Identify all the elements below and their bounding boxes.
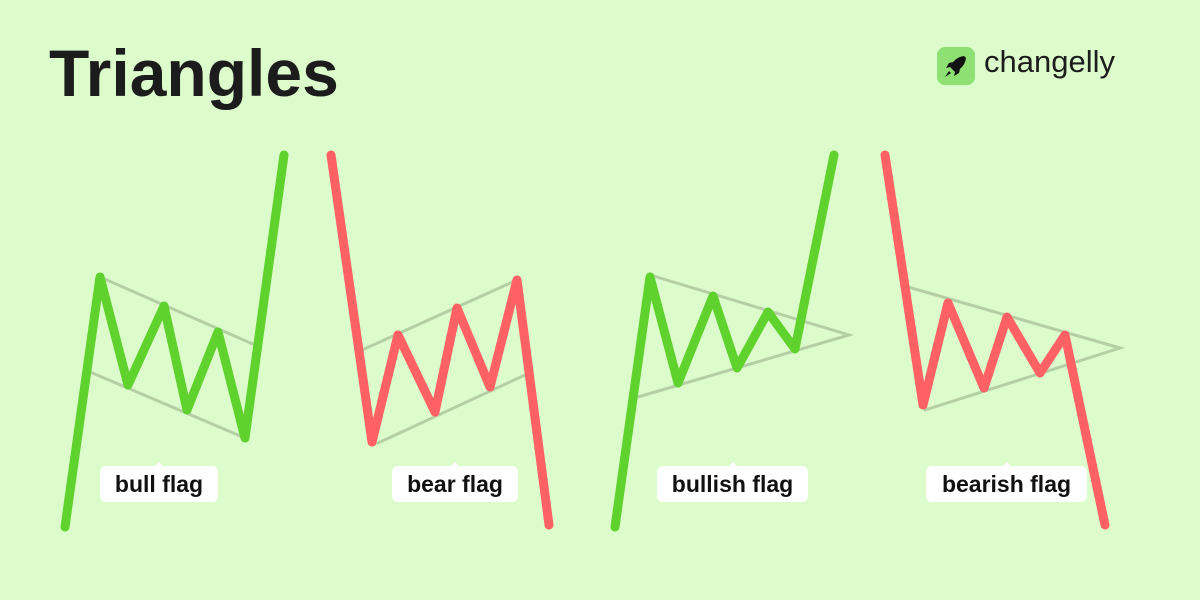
label: bull flag: bull flag — [115, 471, 203, 497]
bear flag line — [331, 155, 549, 525]
label: bear flag: bear flag — [407, 471, 503, 497]
logo: changelly: changelly — [984, 44, 1115, 79]
bullish flag line — [615, 155, 834, 527]
icon: rocket — [937, 47, 975, 85]
label: bullish flag — [657, 466, 808, 502]
label: bullish flag: bullish flag — [672, 471, 793, 497]
logo: changelly — [937, 44, 1115, 85]
label: bearish flag — [926, 466, 1087, 502]
label: bearish flag: bearish flag — [942, 471, 1071, 497]
label: bull flag — [100, 466, 218, 502]
bearish flag line — [885, 155, 1105, 525]
title: Triangles — [49, 36, 339, 110]
label: bear flag — [392, 466, 518, 502]
bull flag line — [65, 155, 284, 527]
